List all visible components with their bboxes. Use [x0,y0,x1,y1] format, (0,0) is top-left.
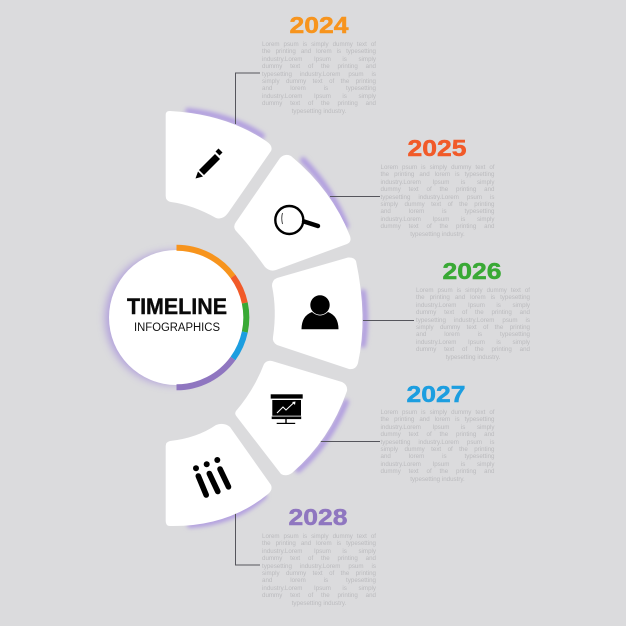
year 2024: 2024 [290,12,348,38]
text block 2026: industry.Lorem Ipsum is simply [416,302,530,309]
text block 2024: typesetting industry. [292,108,346,115]
text block 2025: dummy text of the printing and [380,223,494,230]
text block 2028: Lorem psum is simply dummy text of [262,533,376,540]
text block 2026: typesetting industry. [446,354,500,361]
text block 2026 [416,287,530,361]
text block 2028: industry.Lorem Ipsum is simply [262,585,376,592]
text block 2027: Lorem psum is simply dummy text of [380,409,494,416]
text block 2027: the printing and lorem is typesetting [380,416,494,423]
text block 2027: typesetting industry.Lorem psum is [380,439,494,446]
text block 2025: simply dummy text of the printing [380,201,494,208]
segment 5: three bars [166,424,272,526]
text block 2025: typesetting industry.Lorem psum is [380,194,494,201]
text block 2027: and lorem is typesetting [380,453,494,460]
segment 3: person [272,257,363,369]
year 2025: 2025 [408,135,466,161]
text block 2024: typesetting industry.Lorem psum is [262,71,376,78]
text block 2027 [380,409,494,483]
segment 4: presentation [235,361,347,475]
text block 2026: and lorem is typesetting [416,331,530,338]
text block 2027: simply dummy text of the printing [380,446,494,453]
text block 2024: simply dummy text of the printing [262,78,376,85]
text block 2025: Lorem psum is simply dummy text of [380,164,494,171]
text block 2024: dummy text of the printing and [262,63,376,70]
center circle [109,250,244,385]
text block 2026: Lorem psum is simply dummy text of [416,287,530,294]
text block 2027: dummy text of the printing and [380,431,494,438]
icon: pencil [196,148,222,178]
title: TIMELINE [127,294,227,319]
icon: three bars [193,457,228,495]
icon: person [302,295,338,329]
text block 2024: the printing and lorem is typesetting [262,48,376,55]
connector: 2024 [236,73,260,124]
text block 2027: dummy text of the printing and [380,468,494,475]
text block 2024: industry.Lorem Ipsum is simply [262,93,376,100]
text block 2025: industry.Lorem Ipsum is simply [380,216,494,223]
text block 2025: dummy text of the printing and [380,186,494,193]
year 2027: 2027 [406,381,466,407]
connector: 2027 [320,440,380,442]
text block 2028: typesetting industry.Lorem psum is [262,563,376,570]
text block 2026: dummy text of the printing and [416,346,530,353]
text block 2026: simply dummy text of the printing [416,324,530,331]
connector: 2025 [330,196,380,198]
text block 2026: typesetting industry.Lorem psum is [416,317,530,324]
segment 2: magnifier [234,155,351,271]
text block 2024: and lorem is typesetting [262,85,376,92]
text block 2025: the printing and lorem is typesetting [380,171,494,178]
icon: magnifier [275,206,318,234]
text block 2026: dummy text of the printing and [416,309,530,316]
text block 2024: dummy text of the printing and [262,100,376,107]
text block 2028: the printing and lorem is typesetting [262,540,376,547]
text block 2026: the printing and lorem is typesetting [416,294,530,301]
year 2028: 2028 [288,504,348,530]
text block 2026: industry.Lorem Ipsum is simply [416,339,530,346]
text block 2028: typesetting industry. [292,600,346,607]
text block 2028: dummy text of the printing and [262,555,376,562]
text block 2025: typesetting industry. [410,231,465,238]
text block 2024: industry.Lorem Ipsum is simply [262,56,376,63]
text block 2025 [380,164,494,238]
text block 2024 [262,41,376,115]
text block 2028: dummy text of the printing and [262,592,376,599]
text block 2027: industry.Lorem Ipsum is simply [380,461,494,468]
text block 2028 [262,533,376,607]
text block 2025: and lorem is typesetting [380,208,494,215]
text block 2027: typesetting industry. [410,476,465,483]
text block 2025: industry.Lorem Ipsum is simply [380,179,494,186]
progress ring [176,248,246,387]
icon: presentation board [271,394,303,424]
text block 2028: and lorem is typesetting [262,577,376,584]
segment 1: pencil [166,111,272,218]
glow: segment edges [188,111,365,525]
text block 2024: Lorem psum is simply dummy text of [262,41,376,48]
glow: center circle [105,251,239,385]
subtitle: INFOGRAPHICS [134,322,220,334]
text block 2028: industry.Lorem Ipsum is simply [262,548,376,555]
text block 2027: industry.Lorem Ipsum is simply [380,424,494,431]
connector: 2026 [363,320,414,322]
year 2026: 2026 [442,258,502,284]
connector: 2028 [236,513,260,565]
text block 2028: simply dummy text of the printing [262,570,376,577]
